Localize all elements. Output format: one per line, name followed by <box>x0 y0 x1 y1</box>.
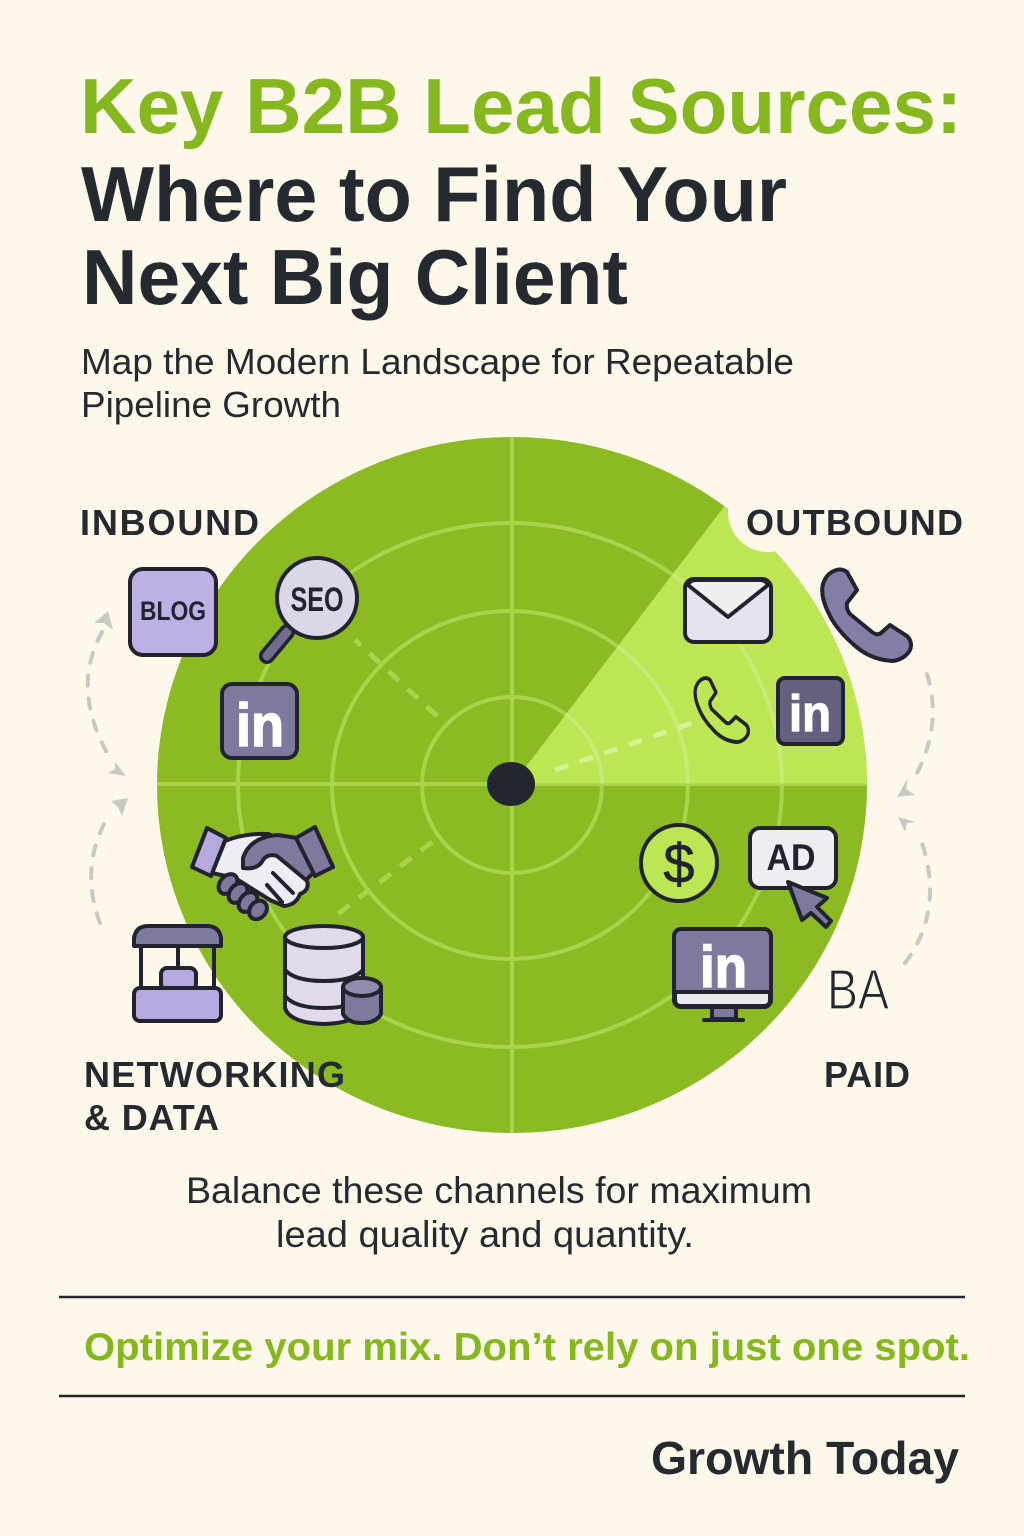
subtitle <box>81 341 794 425</box>
icon: database <box>285 926 381 1024</box>
cycle arrow: paid <box>898 817 930 963</box>
radar sweep wedge <box>526 506 867 784</box>
icon: LinkedIn monitor <box>674 929 771 1020</box>
networking and data label: NETWORKING <box>84 1054 345 1095</box>
icon: envelope <box>685 579 771 642</box>
title: Next Big Client <box>82 233 628 321</box>
balance message <box>186 1170 812 1255</box>
icon: LinkedIn inbound <box>222 684 297 759</box>
outbound label: OUTBOUND <box>746 502 963 543</box>
cycle arrow: networking <box>91 798 128 923</box>
icon: SEO magnifier <box>267 558 357 656</box>
balance message: lead quality and quantity. <box>276 1214 694 1255</box>
cycle arrow: outbound <box>897 674 933 797</box>
brand: Growth Today <box>651 1432 959 1484</box>
subtitle: Pipeline Growth <box>81 384 341 425</box>
title: Where to Find Your <box>81 150 787 238</box>
icon: ad click: AD <box>766 837 816 878</box>
title: Key B2B Lead Sources: <box>80 62 962 150</box>
title <box>80 62 962 321</box>
networking and data label <box>84 1054 345 1138</box>
icon: dollar coin: $ <box>663 832 695 895</box>
icon: ad click <box>750 828 836 927</box>
icon: LinkedIn monitor: in <box>700 935 747 1000</box>
balance message: Balance these channels for maximum <box>186 1170 812 1211</box>
icon: LinkedIn outbound <box>778 678 843 744</box>
icon: LinkedIn outbound: in <box>789 685 831 742</box>
icon: SEO magnifier: SEO <box>290 581 344 619</box>
icon: small phone <box>695 678 748 742</box>
subtitle: Map the Modern Landscape for Repeatable <box>81 341 794 382</box>
inbound label: INBOUND <box>80 502 259 543</box>
icon: LinkedIn inbound: in <box>236 692 284 759</box>
icon: dollar coin <box>641 825 717 901</box>
icon: blog <box>130 569 216 655</box>
stray BA glyph mark: BA <box>827 958 889 1022</box>
networking and data label: & DATA <box>84 1097 219 1138</box>
icon: networking booth <box>134 926 221 1021</box>
radar chart <box>150 420 900 1140</box>
call to action: Optimize your mix. Don’t rely on just one spot. <box>84 1326 970 1369</box>
icon: blog: BLOG <box>140 596 206 626</box>
icon: handshake <box>192 827 333 923</box>
icon: large phone <box>822 570 911 661</box>
cycle arrow: inbound <box>88 611 126 776</box>
paid label: PAID <box>824 1054 910 1095</box>
